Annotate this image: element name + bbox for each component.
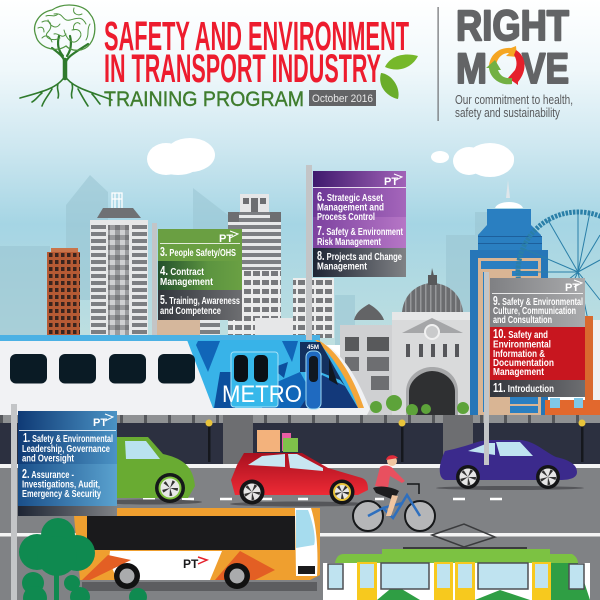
train band bbox=[0, 335, 320, 341]
green car bbox=[98, 437, 202, 504]
building: low blocks bbox=[155, 278, 334, 338]
building: brick tower bbox=[47, 248, 80, 335]
flag pole 6-8 bbox=[306, 165, 312, 340]
cyclist bbox=[353, 455, 435, 531]
item 1: Leadership, Governance bbox=[22, 443, 110, 455]
wall and footpath bbox=[0, 415, 600, 465]
building: right shops bbox=[545, 316, 600, 418]
train bbox=[0, 340, 370, 415]
item 6 bbox=[317, 190, 384, 223]
tree bbox=[19, 518, 147, 600]
item 5: and Competence bbox=[160, 305, 221, 317]
train windows bbox=[10, 354, 195, 384]
tagline: Our commitment to health, bbox=[455, 93, 573, 107]
divider bbox=[438, 7, 439, 121]
flag pole 3-5 bbox=[152, 223, 157, 335]
clouds bbox=[147, 138, 514, 177]
item 9: and Consultation bbox=[493, 314, 552, 326]
item 10: Management bbox=[493, 366, 544, 378]
tagline bbox=[455, 93, 573, 120]
icon: green leaves bbox=[380, 54, 418, 99]
item 7: Risk Management bbox=[317, 236, 381, 248]
item 7 bbox=[317, 224, 403, 248]
train metro wordmark: METRO bbox=[222, 381, 302, 408]
item 8: 8. Projects and Change bbox=[317, 249, 402, 263]
item 7: 7. Safety & Environment bbox=[317, 224, 403, 238]
tagline: safety and sustainability bbox=[455, 106, 561, 120]
subtitle: training program: TRAINING PROGRAM bbox=[104, 88, 304, 111]
panel: grey and red flag items 9 to 11: PT bbox=[565, 282, 579, 294]
logo: right move: VE bbox=[522, 45, 569, 93]
item 4: Management bbox=[160, 276, 213, 288]
panel: green flag items 3 to 5 bbox=[158, 229, 242, 320]
item 2 bbox=[22, 467, 101, 500]
item 10: 10. Safety and bbox=[493, 327, 548, 341]
item 2: Emergency & Security bbox=[22, 488, 101, 500]
panel: grey and red flag items 9 to 11 bbox=[490, 278, 585, 397]
item 3: 3. People Safety/OHS bbox=[160, 245, 236, 259]
blue car bbox=[436, 440, 584, 490]
building: flinders street station bbox=[340, 268, 470, 417]
title: safety and environment bbox=[104, 13, 409, 91]
date badge bbox=[309, 90, 376, 106]
item 1 bbox=[22, 431, 113, 464]
item 8: Management bbox=[317, 260, 367, 272]
logo: right move: RIGHT bbox=[456, 2, 569, 50]
background skyline bbox=[0, 175, 515, 345]
item 10: Information & bbox=[493, 348, 545, 360]
train door bbox=[231, 352, 278, 407]
item 10 bbox=[493, 327, 554, 378]
item 5 bbox=[160, 293, 240, 317]
item 8 bbox=[317, 249, 402, 272]
train number: 45M bbox=[307, 345, 319, 351]
item 6: 6. Strategic Asset bbox=[317, 190, 383, 204]
flag pole 1-2 bbox=[11, 404, 17, 600]
item 6: Management and bbox=[317, 202, 384, 214]
bus bbox=[74, 508, 320, 591]
panel: blue flag items 1 and 2: PT bbox=[93, 417, 107, 429]
building: blue tower bbox=[470, 180, 548, 420]
panel: purple flag items 6 to 8: PT bbox=[384, 176, 398, 188]
item 5: 5. Training, Awareness bbox=[160, 293, 240, 307]
panel: blue flag items 1 and 2 bbox=[18, 411, 117, 516]
item 6: Process Control bbox=[317, 211, 375, 223]
item 4: 4. Contract bbox=[160, 264, 204, 278]
item 10: Documentation bbox=[493, 357, 554, 369]
item 10: Environmental bbox=[493, 338, 551, 350]
building: striped tower bbox=[228, 194, 281, 335]
item 1: and Oversight bbox=[22, 452, 74, 464]
item 11: 11. Introduction bbox=[493, 381, 554, 395]
street lamps bbox=[206, 420, 586, 462]
sky background bbox=[0, 0, 600, 345]
flag pole 9-11 bbox=[484, 272, 489, 465]
logo: right move bbox=[456, 2, 569, 93]
building: grey tower bbox=[90, 193, 148, 335]
panel: green flag items 3 to 5: PT bbox=[219, 233, 233, 245]
item 2: 2. Assurance - bbox=[22, 467, 74, 481]
date badge: October 2016 bbox=[312, 93, 373, 105]
item 1: 1. Safety & Environmental bbox=[23, 431, 113, 445]
item 2: Investigations, Audit, bbox=[22, 478, 100, 490]
road bbox=[0, 464, 600, 600]
logo: right move: M bbox=[456, 45, 487, 93]
panel: purple flag items 6 to 8 bbox=[313, 171, 406, 277]
tram bbox=[323, 524, 590, 600]
street trees bbox=[370, 395, 469, 416]
ferris wheel bbox=[518, 212, 600, 332]
red car bbox=[230, 430, 370, 506]
logo: brain tree bbox=[20, 5, 112, 106]
item 4 bbox=[160, 264, 213, 288]
item 9 bbox=[493, 294, 583, 326]
bus: PT bbox=[183, 557, 199, 571]
